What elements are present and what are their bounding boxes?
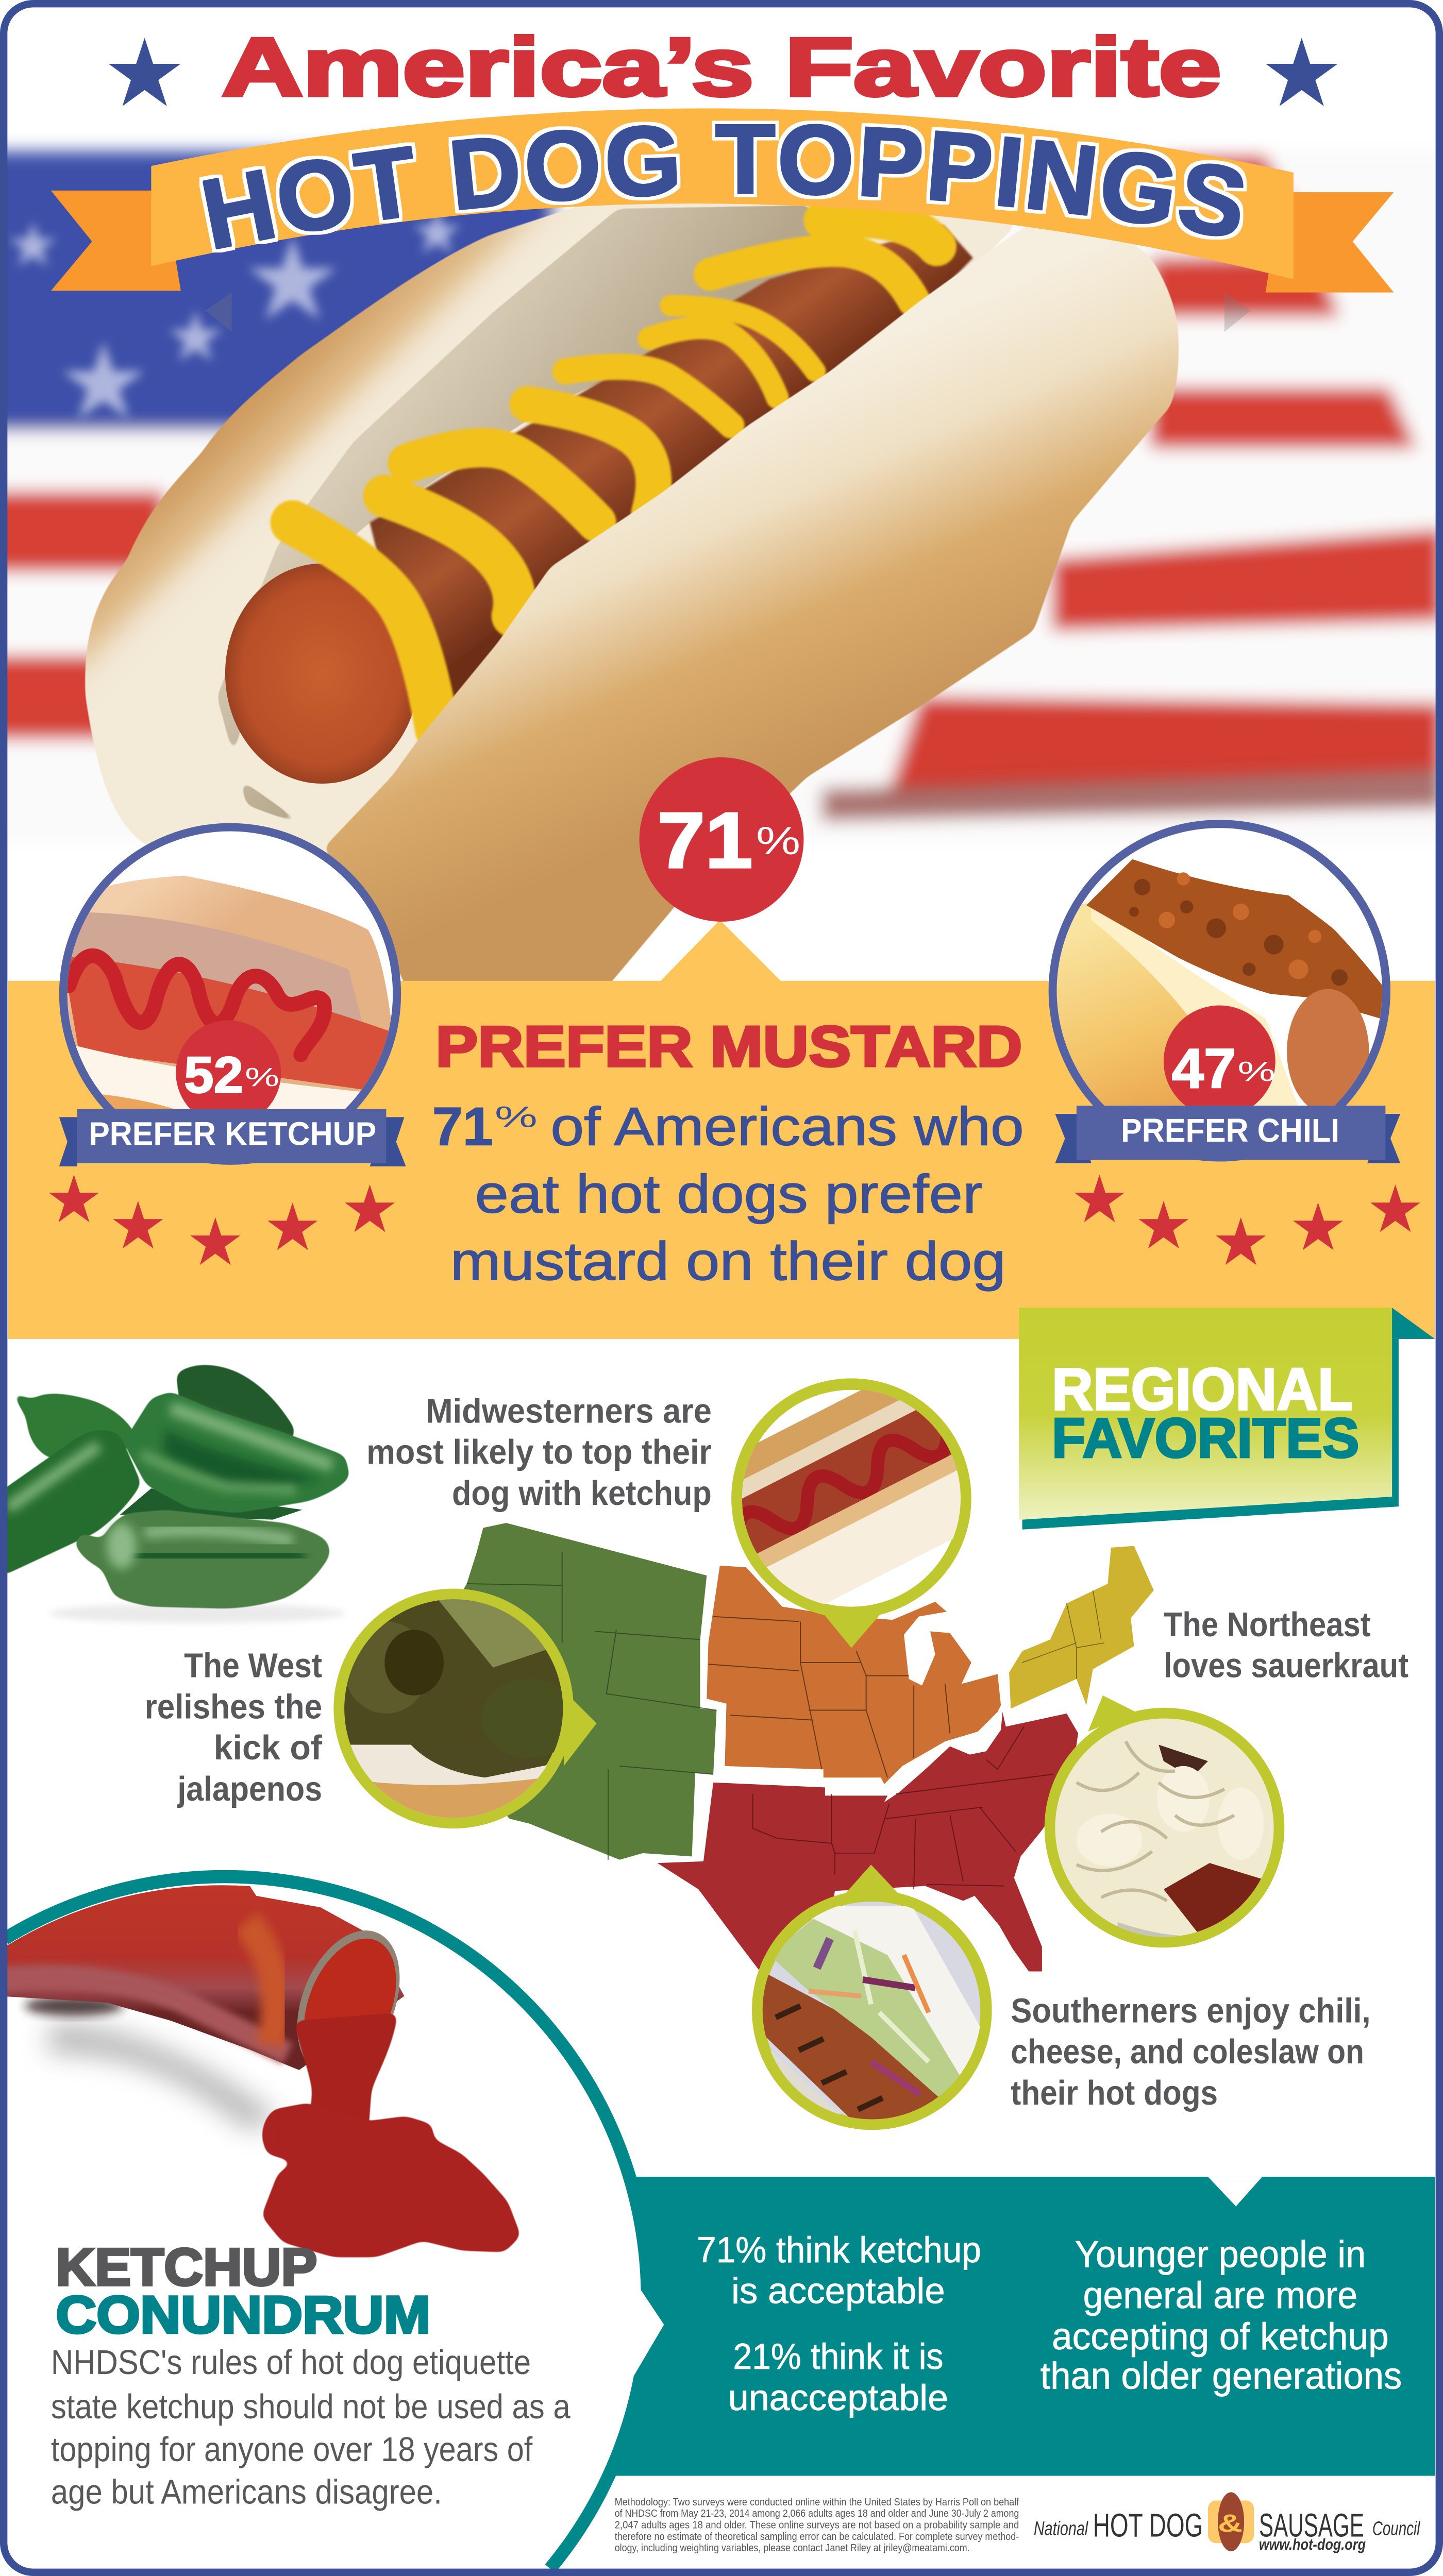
71% badge [640,757,803,922]
text: mustard statement: % [495,1101,538,1133]
title: America’s Favorite [222,21,1221,113]
text: etiquette rules [51,2343,571,2512]
flag background [0,151,1443,841]
47% badge: % [1237,1056,1276,1087]
logo: national hot dog and sausage council: & [1218,2510,1243,2537]
text: midwest caption [366,1392,712,1513]
text: south caption: Southerners enjoy chili, [1011,1991,1371,2030]
52% badge: % [245,1062,279,1092]
panel: ketchup stats [592,2177,1435,2476]
text: ketchup percentages: unacceptable [728,2377,948,2418]
heading: ketchup conundrum [56,2238,431,2344]
logo: national hot dog and sausage council: HOT DOG [1093,2506,1203,2544]
banner: prefer chili: PREFER CHILI [1121,1112,1339,1149]
panel: ketchup badge [49,827,406,1265]
52% badge: 52 [184,1047,243,1104]
text: west caption: The West [184,1647,322,1685]
text: methodology [615,2497,1019,2554]
text: south caption: their hot dogs [1011,2074,1218,2112]
hot dog: front bun [324,225,1179,1006]
text: mustard statement: mustard on their dog [450,1231,1006,1292]
hot dog: sausage [370,225,973,739]
region: west [424,1523,716,1860]
back pepper [176,1365,296,1462]
photo: jalapenos [0,1365,350,1623]
region: northeast [1009,1546,1154,1708]
text: midwest caption: Midwesterners are [426,1392,712,1430]
region: south [658,1712,1078,1988]
circle photo: ketchup dog [62,827,397,1161]
photo: ketchup bottle [0,1856,521,2257]
map of US regions [424,1523,1154,1988]
bottle shadow [49,2024,279,2129]
bottom hidden pepper [120,1488,303,1520]
banner: prefer ketchup [59,1109,406,1166]
text: mustard statement: eat hot dogs prefer [475,1164,983,1224]
text: etiquette rules: NHDSC's rules of hot dog etiquette [51,2343,531,2382]
text: ketchup percentages: 71% think ketchup [697,2229,981,2270]
text: methodology: of NHDSC from May 21-23, 2014 among 2,066 adults ages 18 and older and June 30-July 2 among [615,2508,1019,2519]
ribbon tails [51,191,181,291]
text: methodology: therefore no estimate of theoretical sampling error can be calculated. For complete survey method- [615,2531,1019,2543]
text: mustard statement: 71 [432,1097,493,1157]
heading: prefer mustard: PREFER MUSTARD [435,1014,1022,1079]
heading: ketchup conundrum: KETCHUP [56,2238,317,2297]
pointer [631,2275,664,2381]
hero photo: flag and mustard hot dog [0,151,1443,1006]
text: methodology: ology, including weighting variables, please contact Janet Riley at jriley@meatami.com. [615,2543,970,2554]
text: northeast caption: The Northeast [1164,1605,1371,1644]
panel: regional favorites label [1019,1308,1435,1530]
hot dog: back bun [85,204,1013,854]
callout: south photo [756,1865,986,2127]
ribbon heading: HOT DOG TOPPINGS [199,121,1247,252]
text: younger people: accepting of ketchup [1052,2315,1389,2358]
47% badge [1164,1006,1276,1117]
text: northeast caption [1164,1605,1408,1685]
text: mustard statement [432,1097,1024,1292]
center pepper [123,1392,350,1513]
text: south caption: cheese, and coleslaw on [1011,2032,1364,2071]
text: methodology: 2,047 adults ages 18 and older. These online surveys are not based on a probability sample and [615,2520,1019,2531]
callout: midwest photo [681,1348,1023,1648]
notch pointer [1208,2177,1262,2207]
hot dog: bun interior [217,206,854,829]
circle photo: chili dog [1052,824,1389,1157]
panel: mustard [8,757,1435,1339]
text: west caption: relishes the [145,1687,322,1726]
text: mustard statement: of Americans who [550,1097,1024,1157]
heading: regional favorites: FAVORITES [1052,1406,1359,1469]
52% badge [176,1020,281,1125]
icon: left title star [109,38,180,106]
ribbon banner [51,108,1394,332]
flag stars [9,209,461,419]
hot dog: mustard zigzag [293,218,937,730]
text: ketchup percentages: 21% think it is [733,2336,944,2377]
logo: national hot dog and sausage council: www.hot-dog.org [1259,2536,1366,2553]
logo: national hot dog and sausage council: SAUSAGE [1259,2506,1364,2544]
banner: prefer chili [1055,1106,1400,1163]
text: west caption: kick of [214,1728,323,1767]
logo: national hot dog and sausage council [1034,2492,1420,2553]
hot dog: sausage tip [225,564,419,784]
text: younger people [1041,2233,1402,2397]
text: etiquette rules: age but Americans disagree. [51,2473,442,2512]
region: midwest [707,1566,1001,1784]
text: midwest caption: most likely to top their [366,1433,712,1471]
logo: national hot dog and sausage council: National [1034,2517,1088,2539]
stars [49,1175,395,1265]
heading: regional favorites [1052,1357,1359,1469]
bottle mouth [277,1916,420,2090]
text: methodology: Methodology: Two surveys were conducted online within the United States by Harris Poll on behalf [615,2497,1019,2508]
ribbon arc [151,108,1294,279]
text: younger people: general are more [1083,2274,1357,2316]
text: ketchup percentages: is acceptable [731,2270,945,2311]
faint nav arrows [206,293,1251,332]
callout: west photo [329,1577,597,1840]
text: south caption [1011,1991,1371,2112]
bottle body [0,1856,405,2070]
text: midwest caption: dog with ketchup [452,1474,712,1513]
text: ketchup percentages [697,2229,981,2418]
ketchup puddle [261,2103,521,2257]
text: etiquette rules: topping for anyone over 18 years of [51,2430,533,2469]
banner: prefer ketchup: PREFER KETCHUP [89,1115,376,1153]
71% badge: 71 [658,796,753,885]
stars [1075,1175,1420,1265]
text: younger people: Younger people in [1075,2233,1366,2276]
orange panel [8,920,1435,1339]
left pepper [0,1430,141,1577]
ketchup pour [294,2012,398,2136]
icon: right title star [1266,38,1337,106]
text: younger people: than older generations [1041,2354,1402,2397]
71% badge: % [756,819,800,863]
text: etiquette rules: state ketchup should not be used as a [51,2387,571,2426]
text: northeast caption: loves sauerkraut [1164,1647,1408,1685]
heading: ketchup conundrum: CONUNDRUM [56,2285,431,2344]
top left pepper [10,1390,140,1462]
text: west caption [145,1647,323,1808]
bottom pepper [74,1510,330,1608]
panel: chili badge [1052,824,1420,1265]
text: west caption: jalapenos [177,1770,322,1808]
heading: regional favorites: REGIONAL [1052,1357,1353,1422]
logo: national hot dog and sausage council: Council [1372,2517,1420,2539]
panel: ketchup conundrum circle [0,1856,664,2569]
callout: northeast photo [1050,1696,1282,1955]
47% badge: 47 [1172,1037,1236,1099]
